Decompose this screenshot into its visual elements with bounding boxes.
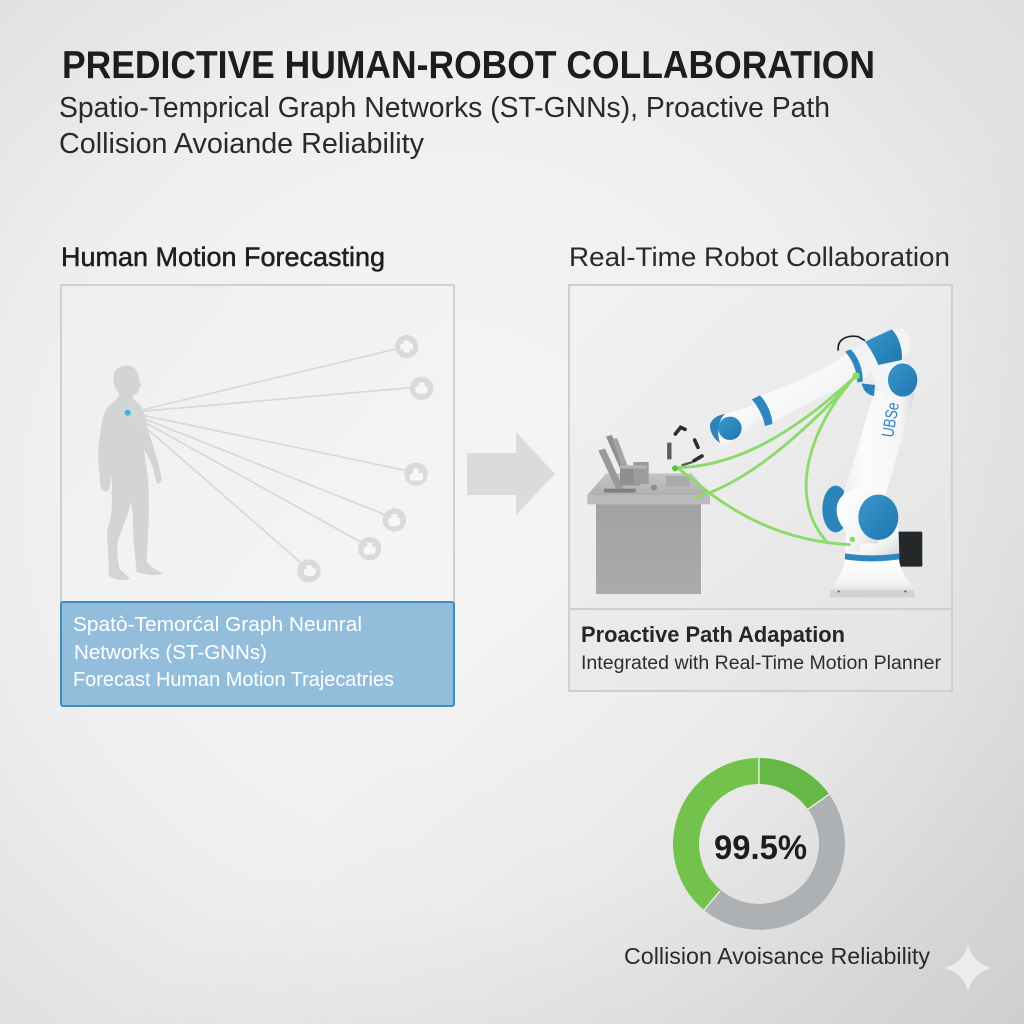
joint marker [125, 410, 131, 416]
illustration: predicted green paths [672, 372, 860, 545]
caption: proactive path adaptation: Integrated with Real-Time Motion Planner [581, 653, 942, 674]
gripper [669, 418, 727, 465]
caption: proactive path adaptation: Proactive Path Adapation [581, 622, 845, 647]
caption: proactive path adaptation [581, 622, 942, 674]
arrow [467, 432, 555, 515]
forecast trajectories [131, 349, 411, 563]
donut value: 99.5% [714, 829, 807, 867]
subtitle [59, 92, 830, 160]
subtitle: Spatio-Temprical Graph Networks (ST-GNNs), Proactive Path [59, 92, 830, 124]
callout: st-gnn description: Forecast Human Motion Trajecatries [73, 669, 394, 691]
callout: st-gnn description [61, 602, 454, 706]
callout: st-gnn description: Networks (ST-GNNs) [74, 642, 267, 664]
illustration: workbench [587, 435, 710, 594]
donut caption: Collision Avoisance Reliability [624, 943, 931, 969]
figure: human silhouette [98, 366, 163, 580]
panel: human motion forecasting [61, 285, 454, 605]
donut chart: collision avoidance reliability [686, 758, 832, 917]
icon: sparkle [944, 944, 992, 992]
heading: human motion forecasting: Human Motion Forecasting [61, 242, 385, 272]
subtitle: Collision Avoiande Reliability [59, 128, 424, 160]
panel: real-time robot collaboration [569, 285, 952, 691]
callout: st-gnn description: Spatò-Temorćal Graph Neunral [73, 614, 362, 636]
title: PREDICTIVE HUMAN-ROBOT COLLABORATION [62, 44, 875, 87]
forecast nodes [297, 335, 433, 583]
illustration: robot arm [669, 328, 922, 597]
robot model label: UBSe [878, 401, 903, 439]
heading: real-time robot collaboration: Real-Time Robot Collaboration [569, 242, 950, 272]
